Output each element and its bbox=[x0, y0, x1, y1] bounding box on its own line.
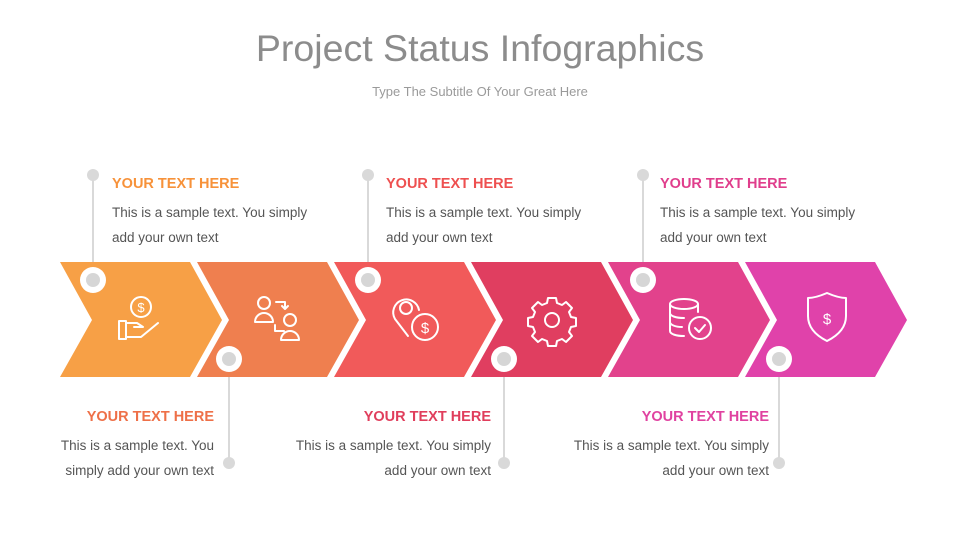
chevron 2 bbox=[197, 262, 359, 377]
text block 5 top bbox=[660, 176, 856, 245]
title: Project Status Infographics bbox=[256, 27, 704, 69]
text block 2 bottom: YOUR TEXT HERE bbox=[87, 409, 214, 425]
icon: location coin: $ bbox=[421, 320, 430, 337]
text block 3 top bbox=[386, 176, 582, 245]
text block 5 top: This is a sample text. You simply add your own text bbox=[660, 205, 855, 245]
icon: database check bbox=[670, 299, 711, 339]
text block 2 bottom bbox=[61, 409, 214, 478]
icon: hand coin bbox=[119, 297, 158, 339]
text block 1 top: YOUR TEXT HERE bbox=[112, 176, 239, 192]
text block 3 top: YOUR TEXT HERE bbox=[386, 176, 513, 192]
chevron 4 bbox=[471, 262, 633, 377]
icon: people exchange bbox=[255, 297, 299, 340]
subtitle: Type The Subtitle Of Your Great Here bbox=[372, 84, 588, 99]
chevron 5 bbox=[608, 262, 770, 377]
chevron 6 bbox=[745, 262, 907, 377]
text block 1 top bbox=[112, 176, 308, 245]
icon: shield dollar bbox=[808, 293, 846, 341]
chevron 3 bbox=[334, 262, 496, 377]
text block 1 top: This is a sample text. You simply add your own text bbox=[112, 205, 307, 245]
chevron 1 bbox=[60, 262, 222, 377]
text block 6 bottom: This is a sample text. You simply add your own text bbox=[574, 438, 769, 478]
icon: location coin bbox=[393, 299, 438, 340]
text block 6 bottom bbox=[574, 409, 769, 478]
text block 4 bottom: This is a sample text. You simply add your own text bbox=[296, 438, 491, 478]
text block 2 bottom: This is a sample text. You simply add your own text bbox=[61, 438, 214, 478]
icon: gear bbox=[528, 298, 576, 346]
text block 3 top: This is a sample text. You simply add your own text bbox=[386, 205, 581, 245]
text block 4 bottom bbox=[296, 409, 491, 478]
text block 5 top: YOUR TEXT HERE bbox=[660, 176, 787, 192]
text block 4 bottom: YOUR TEXT HERE bbox=[364, 409, 491, 425]
icon: shield dollar: $ bbox=[823, 311, 832, 328]
text block 6 bottom: YOUR TEXT HERE bbox=[642, 409, 769, 425]
icon: hand coin: $ bbox=[137, 300, 145, 315]
